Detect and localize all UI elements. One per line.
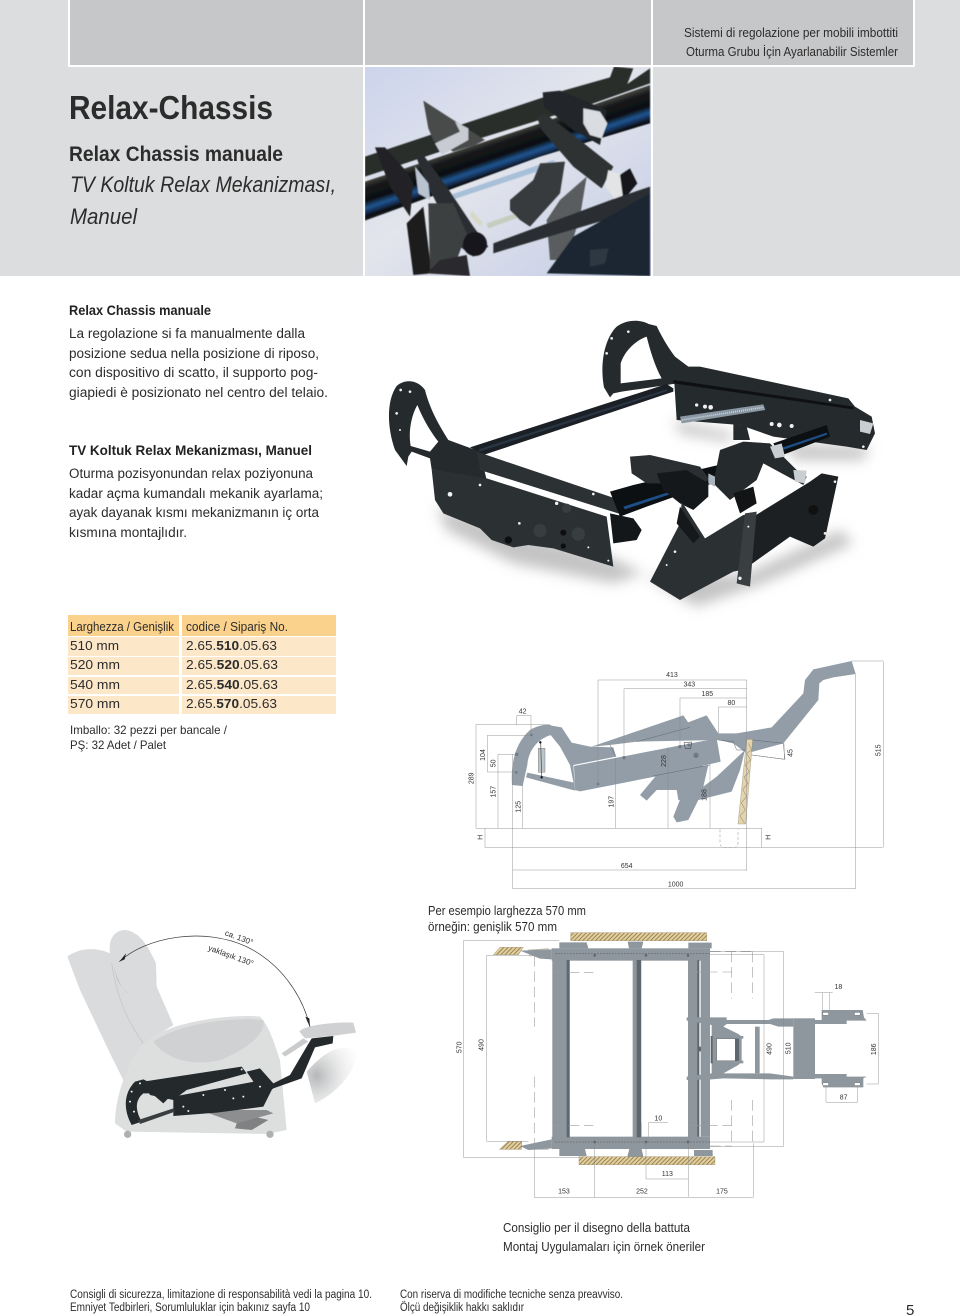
- plan drawing caption: [428, 904, 586, 934]
- text: italian description: Relax Chassis manuale: [69, 302, 211, 318]
- plan view technical drawing: [456, 933, 878, 1197]
- running header text: Oturma Grubu İçin Ayarlanabilir Sistemler: [686, 45, 898, 59]
- footer: safety note: [70, 1289, 372, 1314]
- chair backrest: [67, 930, 173, 1080]
- dimension numbers: 188: [702, 789, 709, 801]
- arc arrow: [119, 936, 310, 1027]
- plan numbers: 186: [871, 1043, 878, 1055]
- dimension lines: [476, 661, 883, 889]
- plan numbers: 10: [654, 1115, 662, 1122]
- footer: safety note: Emniyet Tedbirleri, Sorumluluklar için bakınız sayfa 10: [70, 1302, 310, 1314]
- title: Manuel: [70, 204, 138, 229]
- dimension numbers: H: [478, 835, 485, 840]
- grey mechanism silhouette: [512, 661, 856, 822]
- running header text: [684, 26, 898, 59]
- header band: [0, 0, 960, 276]
- table: 540 mm: [70, 677, 120, 692]
- title: [69, 89, 336, 229]
- mechanism overlay: [126, 1036, 333, 1125]
- spring: [680, 404, 765, 423]
- title: TV Koltuk Relax Mekanizması,: [70, 172, 336, 197]
- dimension numbers: 125: [516, 801, 523, 812]
- dimension numbers: 157: [491, 786, 498, 797]
- side elevation technical drawing: [469, 661, 883, 889]
- dimension numbers: 45: [787, 749, 794, 757]
- text: italian description: [69, 302, 328, 400]
- front side arm: [477, 452, 623, 515]
- mounting advice caption: Consiglio per il disegno della battuta: [503, 1221, 690, 1235]
- running header text: Sistemi di regolazione per mobili imbottiti: [684, 26, 898, 40]
- plan drawing caption: Per esempio larghezza 570 mm: [428, 904, 586, 918]
- plan numbers: 18: [834, 984, 842, 991]
- text: turkish description: Oturma pozisyonundan relax poziyonuna: [69, 466, 313, 481]
- plan numbers: 490: [478, 1039, 485, 1051]
- mounting advice caption: [503, 1221, 705, 1254]
- dimension numbers: 228: [661, 755, 668, 767]
- dimension numbers: 413: [666, 672, 678, 679]
- plan numbers: 252: [636, 1188, 648, 1195]
- photo: mechanism close-up: [365, 67, 652, 277]
- text: turkish description: TV Koltuk Relax Mekanizması, Manuel: [69, 442, 312, 458]
- dimension numbers: 104: [480, 749, 487, 761]
- rear arc plate: [602, 321, 688, 397]
- angle labels: ca. 130°: [224, 928, 254, 947]
- recliner chair photo: yaklaşık 130°: [207, 943, 255, 968]
- title: Relax Chassis manuale: [69, 143, 283, 166]
- piston: [538, 748, 545, 772]
- footer: reservation note: Ölçü değişiklik hakkı saklıdır: [400, 1302, 524, 1314]
- footer: reservation note: [400, 1289, 623, 1314]
- dimension numbers: 1000: [668, 881, 684, 888]
- dimension numbers: [469, 672, 882, 888]
- dimension numbers: 50: [491, 759, 498, 767]
- recliner chair photo: [67, 928, 357, 1138]
- front foot plates: [752, 473, 838, 564]
- footer: reservation note: Con riserva di modifiche tecniche senza preavviso.: [400, 1289, 623, 1301]
- dimension numbers: 654: [621, 863, 633, 870]
- footer: safety note: Consigli di sicurezza, limitazione di responsabilità vedi la pagina 10.: [70, 1289, 372, 1301]
- dimension numbers: 515: [875, 744, 882, 756]
- table: 2.65.570.05.63: [186, 696, 277, 711]
- table: [68, 615, 336, 714]
- packaging note: [70, 723, 228, 752]
- hidden-edge dashes: [534, 952, 753, 1147]
- table: 2.65.510.05.63: [186, 638, 277, 653]
- text: turkish description: kısmına montajlıdır.: [69, 525, 187, 540]
- plan numbers: 570: [456, 1041, 463, 1053]
- text: italian description: La regolazione si fa manualmente dalla: [69, 326, 305, 341]
- dimension numbers: 80: [727, 700, 735, 707]
- text: italian description: con dispositivo di scatto, il supporto pog-: [69, 365, 318, 380]
- table: Larghezza / Genişlik: [70, 619, 174, 634]
- plan numbers: 175: [716, 1189, 728, 1196]
- table: 570 mm: [70, 696, 120, 711]
- wood stop: [738, 739, 753, 824]
- dimension numbers: 289: [469, 772, 476, 784]
- tubes: [610, 458, 750, 517]
- packaging note: Imballo: 32 pezzi per bancale /: [70, 723, 228, 737]
- footrest: [282, 1038, 308, 1057]
- photo: complete relax chassis: [389, 321, 875, 607]
- plan drawing caption: örneğin: genişlik 570 mm: [428, 920, 557, 934]
- plan numbers: 113: [662, 1171, 673, 1178]
- frame: [520, 942, 713, 1157]
- dimension numbers: 343: [684, 682, 695, 689]
- plan numbers: 153: [558, 1189, 570, 1196]
- text: turkish description: kadar açma kumandalı mekanik ayarlama;: [69, 486, 323, 501]
- text: turkish description: ayak dayanak kısmı mekanizmanın iç orta: [69, 505, 319, 520]
- plan numbers: [456, 984, 878, 1196]
- long left plate: [432, 469, 613, 567]
- packaging note: PŞ: 32 Adet / Palet: [70, 738, 167, 752]
- dimension numbers: 197: [608, 796, 615, 807]
- dimension numbers: 42: [519, 708, 527, 715]
- table: 510 mm: [70, 638, 119, 653]
- plan numbers: 510: [786, 1042, 793, 1054]
- text: italian description: giapiedi è posizionato nel centro del telaio.: [69, 385, 328, 400]
- text: turkish description: [69, 442, 323, 540]
- dimension numbers: H: [765, 835, 772, 840]
- plan numbers: 490: [767, 1043, 774, 1055]
- table: 2.65.520.05.63: [186, 657, 278, 672]
- chair seat and base: [115, 1016, 287, 1134]
- center bracket: [630, 455, 710, 483]
- dimension numbers: 185: [702, 691, 713, 698]
- hatched wood stops: [493, 933, 715, 1165]
- extension mechanism: [687, 1010, 867, 1087]
- table: 520 mm: [70, 657, 120, 672]
- mounting advice caption: Montaj Uygulamaları için örnek öneriler: [503, 1240, 705, 1254]
- table: 2.65.540.05.63: [186, 677, 278, 692]
- table: codice / Sipariş No.: [186, 619, 288, 634]
- text: italian description: posizione sedua nella posizione di riposo,: [69, 346, 319, 361]
- dimension lines: [463, 941, 878, 1197]
- plan numbers: 87: [840, 1095, 848, 1102]
- cross bar: [470, 384, 673, 455]
- front left arc plate: [389, 381, 487, 480]
- title: Relax-Chassis: [69, 89, 273, 126]
